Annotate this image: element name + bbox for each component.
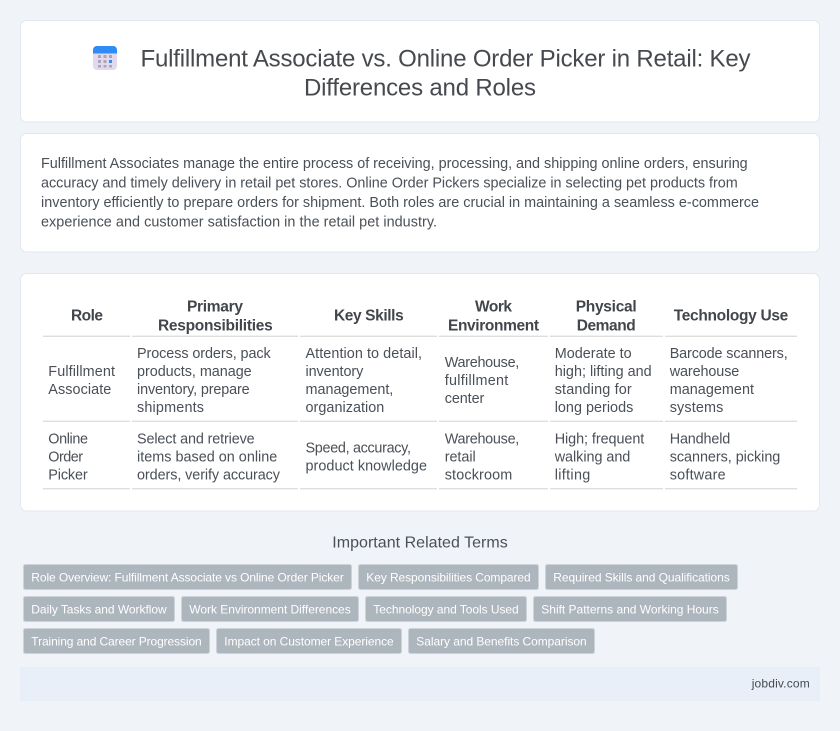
tag: daily tasks: Daily Tasks and Workflow <box>31 602 167 616</box>
table header row: Environment <box>448 318 539 335</box>
title: Fulfillment Associate vs. Online Order Picker in Retail: Key <box>140 46 750 72</box>
title: Differences and Roles <box>304 74 536 102</box>
tag: work environment: Work Environment Differences <box>189 602 351 616</box>
summary text: experience and customer satisfaction in the retail pet industry. <box>41 214 437 230</box>
table header row: Technology Use <box>674 308 789 325</box>
panel: header <box>20 20 820 122</box>
tag: required skills: Required Skills and Qualifications <box>553 570 730 584</box>
table row: Fulfillment Associate: Fulfillment <box>48 364 115 380</box>
table row: Fulfillment Associate: organization <box>306 400 384 416</box>
table row: Fulfillment Associate: high; lifting and <box>555 364 652 380</box>
table row: Fulfillment Associate: standing for <box>555 382 632 398</box>
tag: salary and benefits <box>408 628 594 654</box>
footer source text: jobdiv.com <box>751 677 810 691</box>
table row: Fulfillment Associate: Attention to detail, <box>306 346 422 362</box>
table row: Online Order Picker: Order <box>48 449 83 465</box>
table row: Fulfillment Associate: long periods <box>555 400 633 416</box>
tag: training and career: Training and Career Progression <box>31 634 202 648</box>
table row: Fulfillment Associate: warehouse <box>669 364 739 380</box>
table row: Online Order Picker: Picker <box>48 467 88 483</box>
table row: Fulfillment Associate: inventory, prepare <box>137 382 250 398</box>
table row: Online Order Picker: software <box>670 467 726 483</box>
tag: required skills <box>546 564 738 590</box>
table row: Online Order Picker <box>48 431 780 483</box>
table row: Online Order Picker: Select and retrieve <box>137 431 255 447</box>
table row: Online Order Picker: Handheld <box>670 431 730 447</box>
table row: Online Order Picker: Warehouse, <box>445 431 519 447</box>
table header row: Demand <box>577 318 636 335</box>
tag: key responsibilities: Key Responsibilities Compared <box>366 570 531 584</box>
tag: training and career <box>24 628 210 654</box>
summary text: Fulfillment Associates manage the entire process of receiving, processing, and shipping online orders, ensuring <box>41 156 748 172</box>
panel: summary paragraph <box>20 134 820 252</box>
table row: Fulfillment Associate: fulfillment <box>445 373 508 389</box>
table row: Online Order Picker: retail <box>445 449 476 465</box>
table row: Fulfillment Associate: products, manage <box>137 364 252 380</box>
panel: comparison table <box>20 274 820 511</box>
table row: Fulfillment Associate: shipments <box>137 400 204 416</box>
summary text: accuracy and timely delivery in retail pet stores. Online Order Pickers specialize in selecting pet products from <box>41 175 738 191</box>
table row: Online Order Picker: stockroom <box>445 467 512 483</box>
table row: Fulfillment Associate: center <box>445 391 485 407</box>
table header row: Work <box>475 299 512 316</box>
tag: customer experience: Impact on Customer Experience <box>224 634 394 648</box>
summary text <box>41 156 759 230</box>
tag: work environment <box>182 596 358 622</box>
table row: Fulfillment Associate: management, <box>306 382 393 398</box>
table row: Online Order Picker: Online <box>48 431 88 447</box>
tag: technology and tools <box>366 596 526 622</box>
tag: technology and tools: Technology and Tools Used <box>373 602 519 616</box>
table row: Fulfillment Associate: Barcode scanners, <box>670 346 788 362</box>
tag: salary and benefits: Salary and Benefits Comparison <box>416 634 587 648</box>
table header row: Primary <box>187 299 243 316</box>
table header row: Physical <box>576 299 637 316</box>
table row: Online Order Picker: Speed, accuracy, <box>306 440 411 456</box>
table row: Fulfillment Associate: inventory <box>306 364 364 380</box>
table row: Fulfillment Associate: systems <box>670 400 723 416</box>
table row: Fulfillment Associate: Associate <box>48 382 111 398</box>
table row: Fulfillment Associate: Moderate to <box>555 346 632 362</box>
tag: customer experience <box>216 628 402 654</box>
table row: Fulfillment Associate: management <box>670 382 754 398</box>
tag: key responsibilities <box>358 564 538 590</box>
table header row: Role <box>71 308 103 325</box>
title <box>140 46 750 102</box>
table header row <box>71 299 789 335</box>
table row: Online Order Picker: scanners, picking <box>670 449 780 465</box>
tag: role overview: Role Overview: Fulfillment Associate vs Online Order Picker <box>31 570 344 584</box>
table row: Online Order Picker: product knowledge <box>306 458 427 474</box>
icon: calendar <box>93 46 117 70</box>
table row: Online Order Picker: walking and <box>554 449 630 465</box>
table row: Fulfillment Associate: Warehouse, <box>445 355 519 371</box>
summary text: inventory efficiently to prepare orders for shipment. Both roles are crucial in maintaining a seamless e-commerce <box>41 195 759 211</box>
table row: Online Order Picker: High; frequent <box>555 431 644 447</box>
heading: important related terms: Important Related Terms <box>332 534 508 551</box>
table row: Fulfillment Associate: Process orders, pack <box>137 346 271 362</box>
related term tags <box>24 564 738 654</box>
table row: Fulfillment Associate <box>48 346 788 416</box>
table header row: Responsibilities <box>158 318 273 335</box>
table header row: Key Skills <box>334 308 404 325</box>
tag: daily tasks <box>24 596 174 622</box>
footer bar <box>20 667 820 701</box>
table row: Online Order Picker: lifting <box>555 467 590 483</box>
tag: shift patterns: Shift Patterns and Working Hours <box>541 602 719 616</box>
table row: Online Order Picker: items based on online <box>137 449 277 465</box>
tag: shift patterns <box>534 596 726 622</box>
tag: role overview <box>24 564 352 590</box>
table row: Online Order Picker: orders, verify accuracy <box>137 467 281 483</box>
